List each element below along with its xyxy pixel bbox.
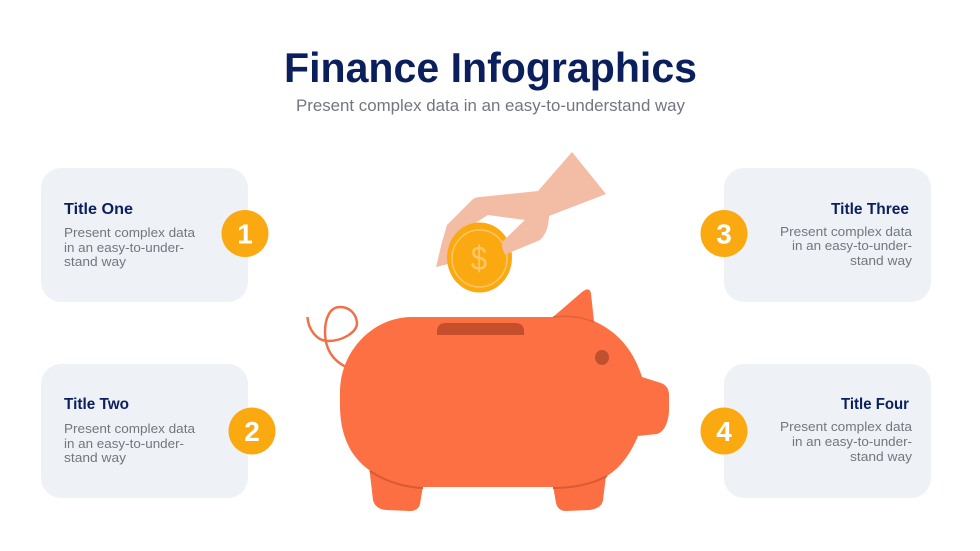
coin xyxy=(447,222,512,292)
title: Finance Infographics xyxy=(284,44,697,91)
panel: title one: Title One xyxy=(64,201,133,218)
thumb xyxy=(502,205,549,255)
badge 3: 3 xyxy=(716,218,732,250)
dollar sign: $ xyxy=(471,240,487,278)
panel: title one xyxy=(41,168,248,302)
panel: title two: Title Two xyxy=(64,396,129,413)
badge 3 xyxy=(700,210,748,257)
panel: title two: in an easy-to-under- xyxy=(64,436,184,451)
pig legs xyxy=(369,466,607,511)
pig tail xyxy=(308,307,357,367)
panel: title three: Title Three xyxy=(831,201,909,218)
panel: title four: Title Four xyxy=(841,396,909,413)
badge 1 xyxy=(222,210,268,257)
hand xyxy=(436,152,606,267)
panel: title two: stand way xyxy=(64,450,127,465)
badge 2: 2 xyxy=(244,416,260,447)
leg creases xyxy=(370,471,607,488)
badge 4 xyxy=(700,408,748,454)
panel: title three: Present complex data xyxy=(780,224,913,239)
panel: title two: Present complex data xyxy=(64,421,196,436)
panel: title one: stand way xyxy=(64,254,127,269)
panel: title four xyxy=(724,364,931,498)
pig eye xyxy=(595,350,609,365)
panel: title four: stand way xyxy=(850,449,913,464)
badge 4: 4 xyxy=(716,416,732,447)
icon: piggy bank xyxy=(308,289,669,511)
panel: title three: stand way xyxy=(850,253,913,268)
panel: title four: in an easy-to-under- xyxy=(792,434,912,449)
panel: title three xyxy=(724,168,931,302)
pig body xyxy=(340,289,669,487)
badge 1: 1 xyxy=(237,218,253,250)
ear crease xyxy=(553,316,594,322)
panel: title four: Present complex data xyxy=(780,419,913,434)
badge 2 xyxy=(228,408,276,454)
panel: title three: in an easy-to-under- xyxy=(792,238,912,253)
panel: title one: in an easy-to-under- xyxy=(64,240,184,255)
icon: hand dropping coin xyxy=(436,152,606,292)
panel: title one: Present complex data xyxy=(64,225,196,240)
panel: title two xyxy=(41,364,248,498)
subtitle: Present complex data in an easy-to-understand way xyxy=(296,96,685,115)
coin slot xyxy=(437,323,524,335)
